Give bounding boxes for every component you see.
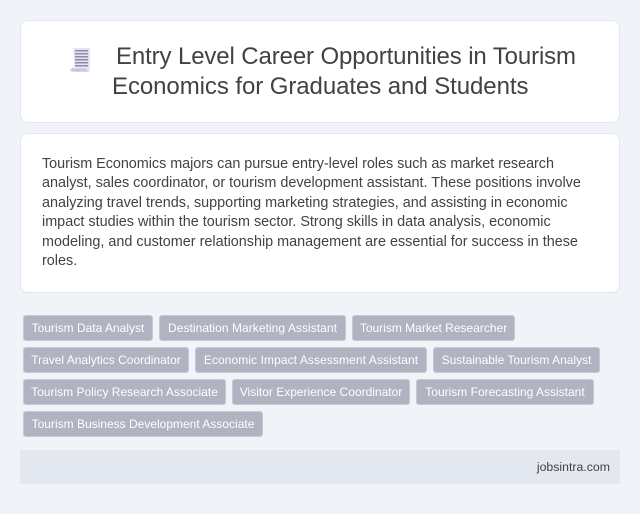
tag <box>23 347 189 373</box>
tag <box>352 315 515 341</box>
tag: Economic Impact Assessment Assistant <box>204 353 418 367</box>
text block: description: analyzing travel trends, supporting marketing strategies, and assisting in economic <box>42 194 568 210</box>
title: Economics for Graduates and Students <box>112 73 528 100</box>
tag <box>159 315 346 341</box>
tag: Tourism Policy Research Associate <box>31 385 218 399</box>
tag: Tourism Market Researcher <box>360 321 507 335</box>
text block: description: Tourism Economics majors can pursue entry-level roles such as market research <box>42 156 554 172</box>
text block: description: modeling, and customer relationship management are essential for success in these <box>42 234 578 250</box>
tag <box>232 379 410 405</box>
tag <box>23 315 153 341</box>
panel: description card <box>20 133 620 293</box>
title <box>112 43 576 100</box>
text block: description: impact studies within the tourism sector. Strong skills in data analysis, economic <box>42 214 551 230</box>
icon: document receipt <box>70 48 90 72</box>
tag: Destination Marketing Assistant <box>168 321 337 335</box>
tag: Visitor Experience Coordinator <box>240 385 402 399</box>
tag <box>195 347 427 373</box>
tag <box>416 379 594 405</box>
tag: Tourism Data Analyst <box>32 321 144 335</box>
tag: Tourism Forecasting Assistant <box>425 385 585 399</box>
footer bar <box>20 450 620 484</box>
panel: career tags <box>23 315 600 437</box>
tag: Tourism Business Development Associate <box>32 417 254 431</box>
tag: Travel Analytics Coordinator <box>31 353 181 367</box>
tag <box>23 411 263 437</box>
text block: description <box>42 156 581 269</box>
text block: description: analyst, sales coordinator, or tourism development assistant. These positions involve <box>42 175 581 191</box>
tag: Sustainable Tourism Analyst <box>442 353 591 367</box>
panel: header card <box>20 20 620 123</box>
footer source text: jobsintra.com <box>537 460 610 474</box>
title: Entry Level Career Opportunities in Tourism <box>116 43 576 70</box>
tag <box>433 347 600 373</box>
text block: description: roles. <box>42 253 77 269</box>
tag <box>23 379 226 405</box>
